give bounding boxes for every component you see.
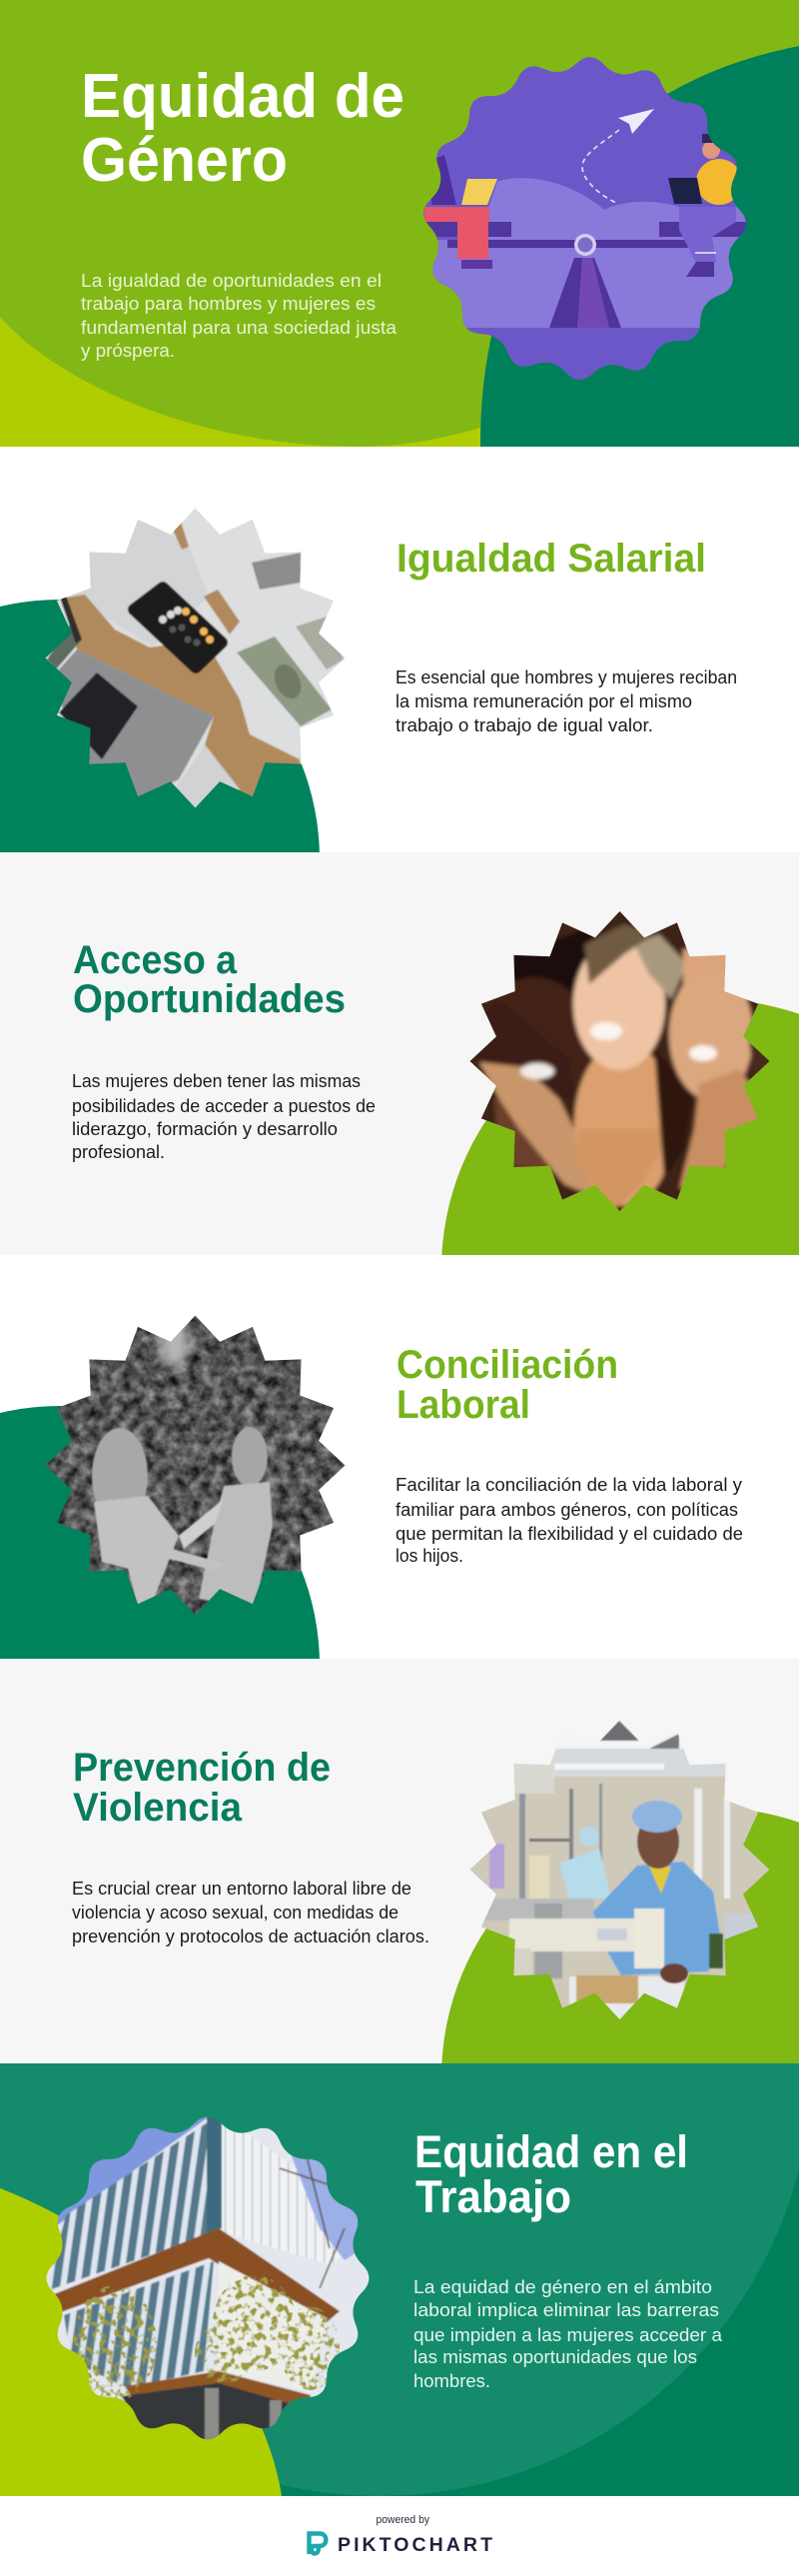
intro text: trabajo para hombres y mujeres es [81,294,376,314]
intro text [81,271,398,361]
photo: two women in a forest [40,1309,350,1629]
body text: La equidad de género en el ámbito [413,2277,712,2297]
heading: Equidad en el [414,2126,688,2177]
photo: modern office building [46,2116,370,2440]
body text: profesional. [72,1142,165,1162]
body text: familiar para ambos géneros, con políticas [396,1500,738,1520]
body text: laboral implica eliminar las barreras [413,2300,719,2320]
icon: piktochart logo [310,2534,326,2554]
powered by label: powered by [376,2514,429,2526]
body text: los hijos. [396,1546,463,1566]
body text: Facilitar la conciliación de la vida laboral y [396,1475,742,1495]
heading: Oportunidades [73,977,346,1021]
body text: liderazgo, formación y desarrollo [72,1119,338,1139]
body text: posibilidades de acceder a puestos de [72,1096,376,1116]
body text: que impiden a las mujeres acceder a [413,2325,723,2345]
body text [396,1475,743,1566]
heading: Conciliación [397,1343,618,1387]
heading [398,1349,616,1419]
heading: Violencia [73,1786,243,1830]
green curved shape [441,1003,799,1255]
heading: Laboral [397,1383,530,1427]
photo: three women smiling [464,904,779,1219]
body text: la misma remuneración por el mismo [396,691,692,711]
dark green curved shape [0,1406,320,1659]
intro text: fundamental para una sociedad justa [81,318,398,338]
body text: trabajo o trabajo de igual valor. [396,715,653,735]
footer: piktochart branding [0,2496,799,2576]
panel: prevención de violencia [0,1659,799,2063]
intro text: La igualdad de oportunidades en el [81,271,382,291]
body text [396,667,737,735]
body text: prevención y protocolos de actuación claros. [72,1927,429,1946]
lime curved shape [0,317,480,447]
green curved shape [441,1811,799,2063]
body text: violencia y acoso sexual, con medidas de [72,1903,399,1923]
body text: que permitan la flexibilidad y el cuidado de [396,1524,743,1544]
body text [413,2277,723,2391]
body text: Es esencial que hombres y mujeres reciban [396,667,737,687]
body text [72,1071,376,1162]
heading [415,2134,685,2222]
intro text: y próspera. [81,341,175,361]
body text: las mismas oportunidades que los [413,2347,697,2367]
photo: desk with calculator [40,500,350,819]
dark green curved shape [480,46,799,447]
panel: acceso a oportunidades [0,852,799,1255]
panel: header [0,0,799,447]
panel: equidad en el trabajo [0,2063,799,2496]
title [83,72,402,182]
lime curved shape [0,2188,282,2496]
body text [72,1879,429,1946]
title: Equidad de [81,62,404,131]
heading: Acceso a [73,938,238,982]
panel: igualdad salarial [0,508,736,852]
title: Género [81,126,288,195]
lighter green circle [0,2063,799,2496]
heading [73,1751,330,1821]
dark green curved shape [0,600,320,852]
heading [74,945,344,1021]
heading: Igualdad Salarial [397,537,706,581]
body text: Las mujeres deben tener las mismas [72,1071,361,1091]
heading: Prevención de [73,1746,331,1790]
photo: textile factory worker [464,1714,774,2031]
panel: conciliación laboral [0,1315,743,1659]
piktochart wordmark: PIKTOCHART [338,2534,492,2556]
illustration: seesaw on wavy badge [414,50,754,390]
body text: hombres. [413,2371,490,2391]
body text: Es crucial crear un entorno laboral libre de [72,1879,411,1899]
heading: Trabajo [415,2171,571,2222]
